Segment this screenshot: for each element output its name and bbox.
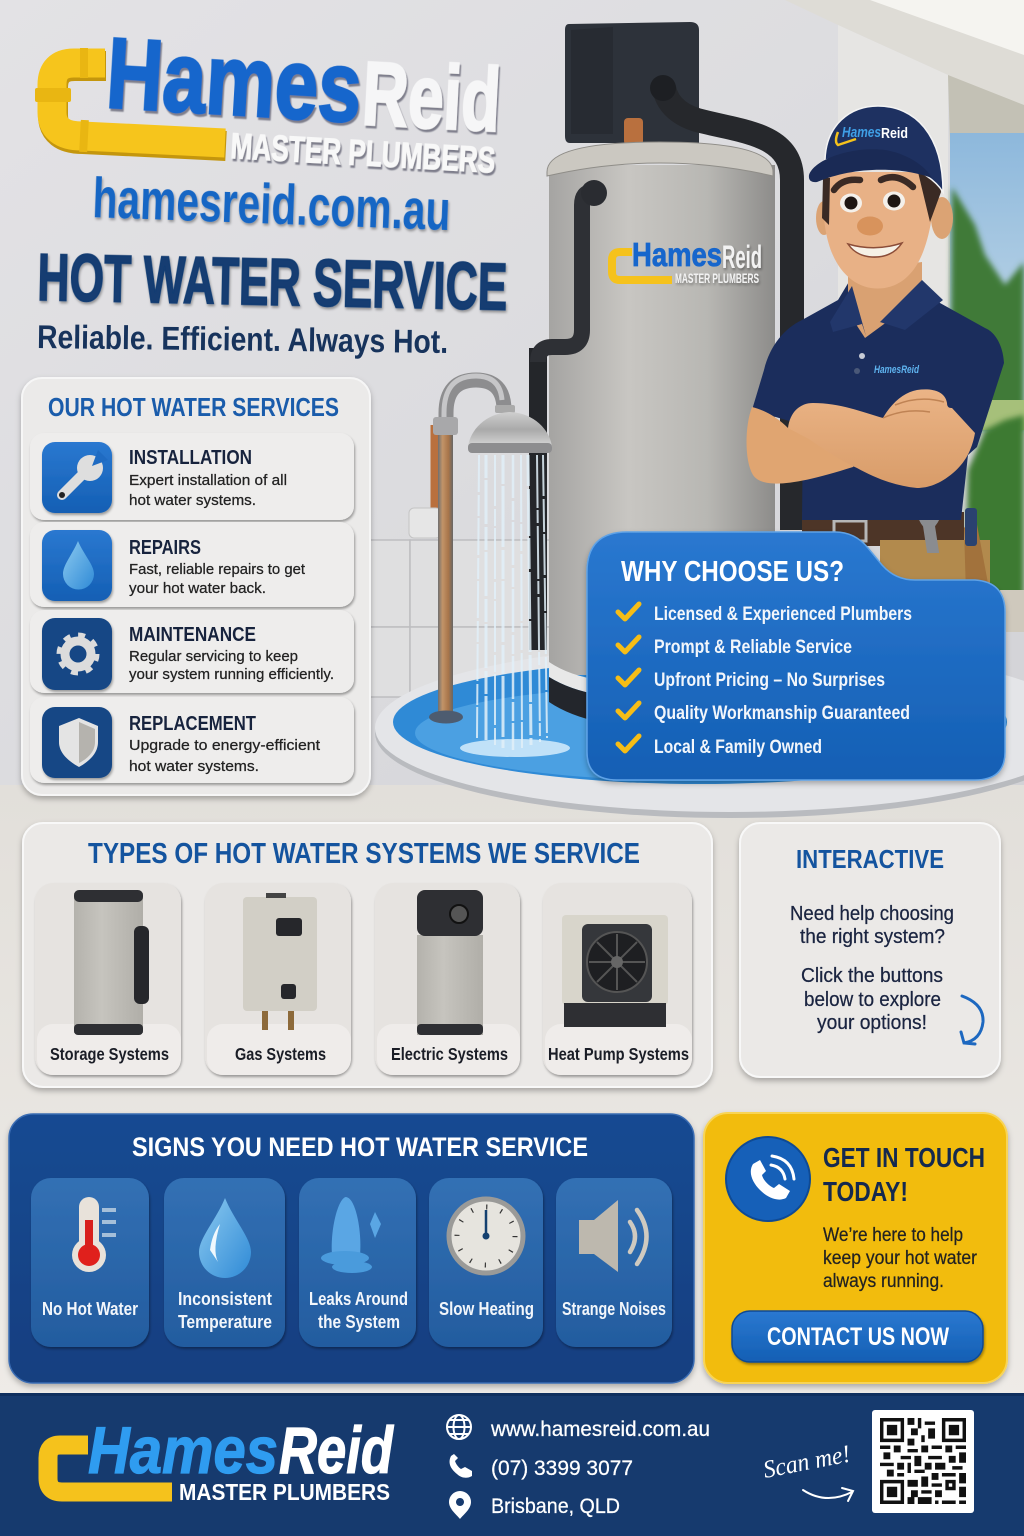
icon: globe (447, 1415, 471, 1439)
nose and smile (848, 216, 902, 257)
footer logo (48, 1413, 394, 1505)
panel: signs you need service (9, 1114, 694, 1383)
service: repairs: Fast, reliable repairs to get (129, 561, 306, 578)
panel: our hot water services (22, 378, 370, 795)
card: no hot water (31, 1178, 149, 1347)
water streams (477, 455, 547, 750)
icon: location pin (449, 1491, 471, 1519)
shirt (752, 280, 1004, 520)
service: maintenance (30, 610, 354, 693)
service: installation (30, 433, 354, 520)
panel: types of hot water systems (23, 823, 712, 1087)
checklist: Licensed & Experienced Plumbers (654, 604, 912, 625)
qr code (872, 1410, 974, 1513)
contact text (823, 1225, 978, 1292)
card: heat pump systems (543, 883, 692, 1075)
card: inconsistent temperature: Inconsistent (178, 1289, 272, 1309)
heading: types: TYPES OF HOT WATER SYSTEMS WE SERVICE (88, 838, 640, 870)
service: repairs (30, 522, 354, 607)
card: strange noises: Strange Noises (562, 1299, 666, 1319)
checklist: Local & Family Owned (654, 737, 822, 758)
crossed arms (746, 389, 975, 488)
panel: why choose us (587, 532, 1005, 780)
logo: Hames Reid Master Plumbers (35, 17, 503, 181)
card: strange noises (556, 1178, 672, 1347)
contact text: We’re here to help (823, 1225, 963, 1246)
card: electric systems: Electric Systems (391, 1044, 508, 1064)
footer (0, 1393, 1024, 1536)
logo: Hames Reid Master Plumbers: Reid (360, 44, 503, 151)
card: leaks around the system: Leaks Around (309, 1289, 408, 1309)
card: storage systems (35, 883, 181, 1075)
website url: hamesreid.com.au (92, 166, 452, 243)
neck and collar (848, 262, 922, 338)
service: replacement: REPLACEMENT (129, 713, 256, 735)
shower (409, 376, 552, 750)
tank logo: MASTER PLUMBERS (675, 270, 759, 286)
arrow: curved (961, 996, 983, 1044)
service: maintenance: your system running efficiently. (129, 666, 334, 683)
card: no hot water: No Hot Water (42, 1299, 138, 1319)
scan me (761, 1441, 853, 1501)
service: repairs: your hot water back. (129, 580, 266, 597)
card: slow heating: Slow Heating (439, 1299, 534, 1319)
footer logo: Reid (279, 1413, 394, 1487)
service: installation: Expert installation of all (129, 472, 287, 489)
service: installation: hot water systems. (129, 492, 256, 509)
house exterior and garden (785, 0, 1024, 632)
button: contact us now (732, 1311, 983, 1362)
contact details: (07) 3399 3077 (491, 1457, 633, 1480)
card: inconsistent temperature: Temperature (178, 1312, 272, 1332)
panel: get in touch (704, 1113, 1007, 1383)
card: storage systems: Storage Systems (50, 1044, 169, 1064)
help text: Click the buttons (801, 965, 943, 987)
wall tiles (370, 540, 550, 697)
cap (809, 106, 943, 192)
footer logo: Hames (88, 1413, 278, 1487)
checklist (618, 604, 912, 758)
cap: Reid (881, 125, 908, 142)
heading: interactive: INTERACTIVE (796, 844, 944, 874)
water tray (375, 644, 1024, 818)
service: replacement: hot water systems. (129, 758, 259, 775)
checklist: Upfront Pricing – No Surprises (654, 670, 885, 691)
tagline: Reliable. Efficient. Always Hot. (37, 318, 448, 360)
service: repairs: REPAIRS (129, 537, 201, 559)
service: maintenance: MAINTENANCE (129, 624, 256, 646)
panel: interactive (740, 823, 1000, 1077)
contact details (447, 1415, 710, 1519)
panel: get in touch: TODAY! (823, 1176, 908, 1207)
brows (834, 177, 913, 190)
service: replacement (30, 697, 354, 783)
plumber character (746, 106, 1004, 600)
contact text: keep your hot water (823, 1248, 978, 1269)
card: leaks around the system (299, 1178, 416, 1347)
title: hot water service: HOT WATER SERVICE (37, 240, 508, 325)
card: heat pump systems: Heat Pump Systems (548, 1044, 689, 1064)
belt and tool pouch (802, 502, 990, 600)
heading: signs: SIGNS YOU NEED HOT WATER SERVICE (132, 1132, 588, 1162)
service: installation: INSTALLATION (129, 447, 252, 469)
head (823, 172, 936, 289)
icon: phone small (450, 1454, 472, 1478)
card: electric systems (375, 883, 520, 1075)
card: leaks around the system: the System (318, 1312, 400, 1332)
contact text: always running. (823, 1271, 944, 1292)
logo: Hames Reid Master Plumbers: MASTER PLUMBERS (230, 125, 496, 181)
heading: services: OUR HOT WATER SERVICES (48, 392, 339, 422)
tank logo: Hames (632, 236, 722, 273)
tank logo: Reid (722, 239, 762, 275)
card: inconsistent temperature (164, 1178, 285, 1347)
ears (816, 197, 953, 239)
cap: Hames (842, 124, 881, 141)
tank logo (612, 236, 762, 286)
service: replacement: Upgrade to energy-efficient (129, 737, 321, 754)
help text: Need help choosing (790, 903, 954, 925)
scan me: Scan me! (761, 1441, 853, 1484)
water heater tank (538, 22, 792, 722)
help text: the right system? (800, 926, 945, 948)
eyes (840, 192, 905, 212)
contact details: www.hamesreid.com.au (490, 1418, 710, 1441)
card: gas systems (205, 883, 351, 1075)
icon: phone (726, 1137, 810, 1221)
footer logo: MASTER PLUMBERS (179, 1479, 390, 1505)
checklist: Prompt & Reliable Service (654, 637, 852, 658)
button: contact us now: CONTACT US NOW (767, 1323, 949, 1351)
card: gas systems: Gas Systems (235, 1044, 326, 1064)
help text: your options! (817, 1012, 927, 1034)
service: maintenance: Regular servicing to keep (129, 648, 298, 665)
checklist: Quality Workmanship Guaranteed (654, 703, 910, 724)
shirt logo: HamesReid (874, 364, 919, 376)
help text (790, 903, 954, 1034)
logo: Hames Reid Master Plumbers: Hames (104, 17, 365, 144)
heading: get in touch: GET IN TOUCH (823, 1142, 985, 1173)
help text: below to explore (804, 989, 941, 1011)
card: slow heating (429, 1178, 543, 1347)
heading: why choose us: WHY CHOOSE US? (621, 556, 844, 588)
contact details: Brisbane, QLD (491, 1495, 620, 1518)
